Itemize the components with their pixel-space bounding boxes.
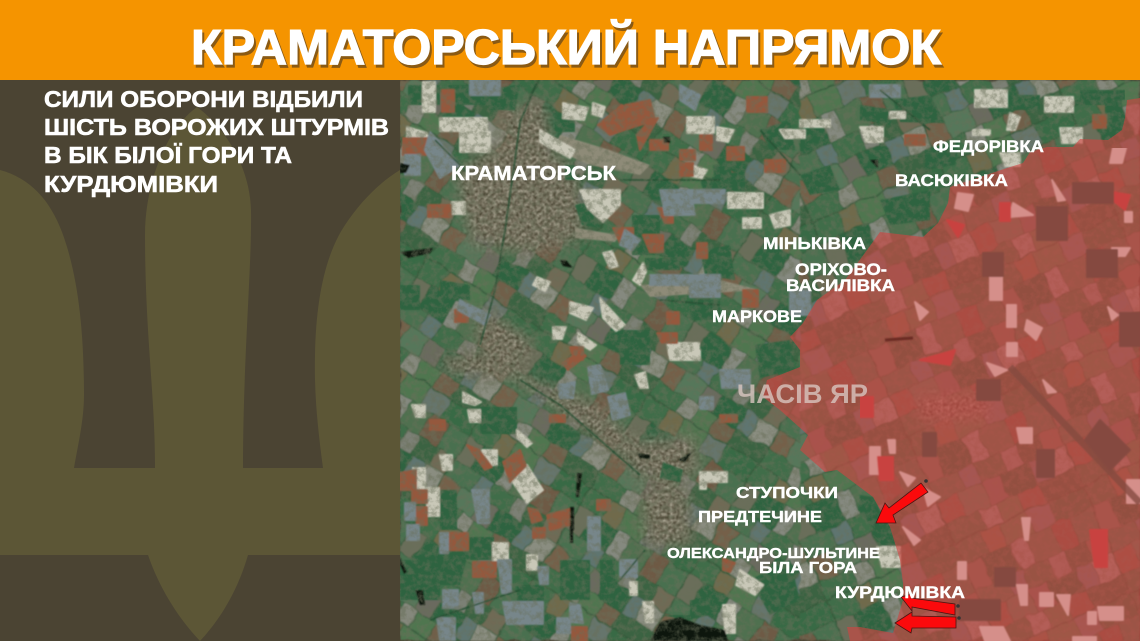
- occupied fields: dark: [923, 183, 1140, 620]
- text block: summary: КУРДЮМІВКИ: [44, 171, 218, 197]
- map fields: white and pale: [407, 82, 1082, 633]
- occupied territory overlay: [763, 98, 1140, 641]
- occupied fields: pink: [870, 148, 1140, 641]
- arrow: attack toward Курдюмівка north: [901, 594, 960, 615]
- label: Олександро-Шультине: ОЛЕКСАНДРО-ШУЛЬТИНЕ: [667, 545, 880, 562]
- map texture: [400, 80, 1140, 641]
- title shadow: КРАМАТОРСЬКИЙ НАПРЯМОК: [193, 23, 943, 78]
- text block: summary: В БІК БІЛОЇ ГОРИ ТА: [44, 142, 292, 168]
- labels: settlements: [451, 138, 1044, 602]
- label: Маркове: МАРКОВЕ: [712, 308, 802, 326]
- map terrain: town texture: [438, 100, 990, 550]
- text block: summary: ШІСТЬ ВОРОЖИХ ШТУРМІВ: [44, 114, 389, 140]
- label: Василівка: ВАСИЛІВКА: [786, 277, 895, 295]
- label: Ступочки: СТУПОЧКИ: [736, 485, 838, 502]
- map fields: green: [400, 84, 1125, 620]
- arrow: attack toward Курдюмівка south: [895, 612, 961, 633]
- label: Предтечине: ПРЕДТЕЧИНЕ: [698, 509, 822, 526]
- arrow: attack toward Ступочки: [876, 479, 928, 523]
- label: Васюківка: ВАСЮКІВКА: [895, 172, 1008, 190]
- icon: trident emblem: [0, 107, 400, 641]
- title: КРАМАТОРСЬКИЙ НАПРЯМОК: [191, 20, 941, 75]
- label: Біла Гора: БІЛА ГОРА: [759, 560, 858, 577]
- label: Курдюмівка: КУРДЮМІВКА: [835, 584, 965, 602]
- occupied fields: bright red: [860, 190, 1130, 567]
- label: Міньківка: МІНЬКІВКА: [763, 235, 866, 253]
- label: Краматорськ: КРАМАТОРСЬК: [451, 163, 617, 185]
- map fields: rust: [400, 90, 1106, 641]
- map terrain: bare ground: [555, 135, 760, 297]
- left panel: [0, 80, 400, 641]
- map lines: tree belts: [430, 82, 930, 620]
- map fields: grey-blue: [405, 80, 900, 640]
- text block: summary: СИЛИ ОБОРОНИ ВІДБИЛИ: [44, 86, 363, 112]
- title banner: [0, 0, 1140, 80]
- label: Федорівка: ФЕДОРІВКА: [933, 138, 1044, 156]
- text block: summary: [44, 86, 389, 197]
- label: Оріхово-: ОРІХОВО-: [795, 261, 887, 279]
- satellite map: [400, 80, 1140, 641]
- label: Часів Яр: ЧАСІВ ЯР: [737, 379, 868, 409]
- map water: lakes and ponds: [400, 137, 878, 641]
